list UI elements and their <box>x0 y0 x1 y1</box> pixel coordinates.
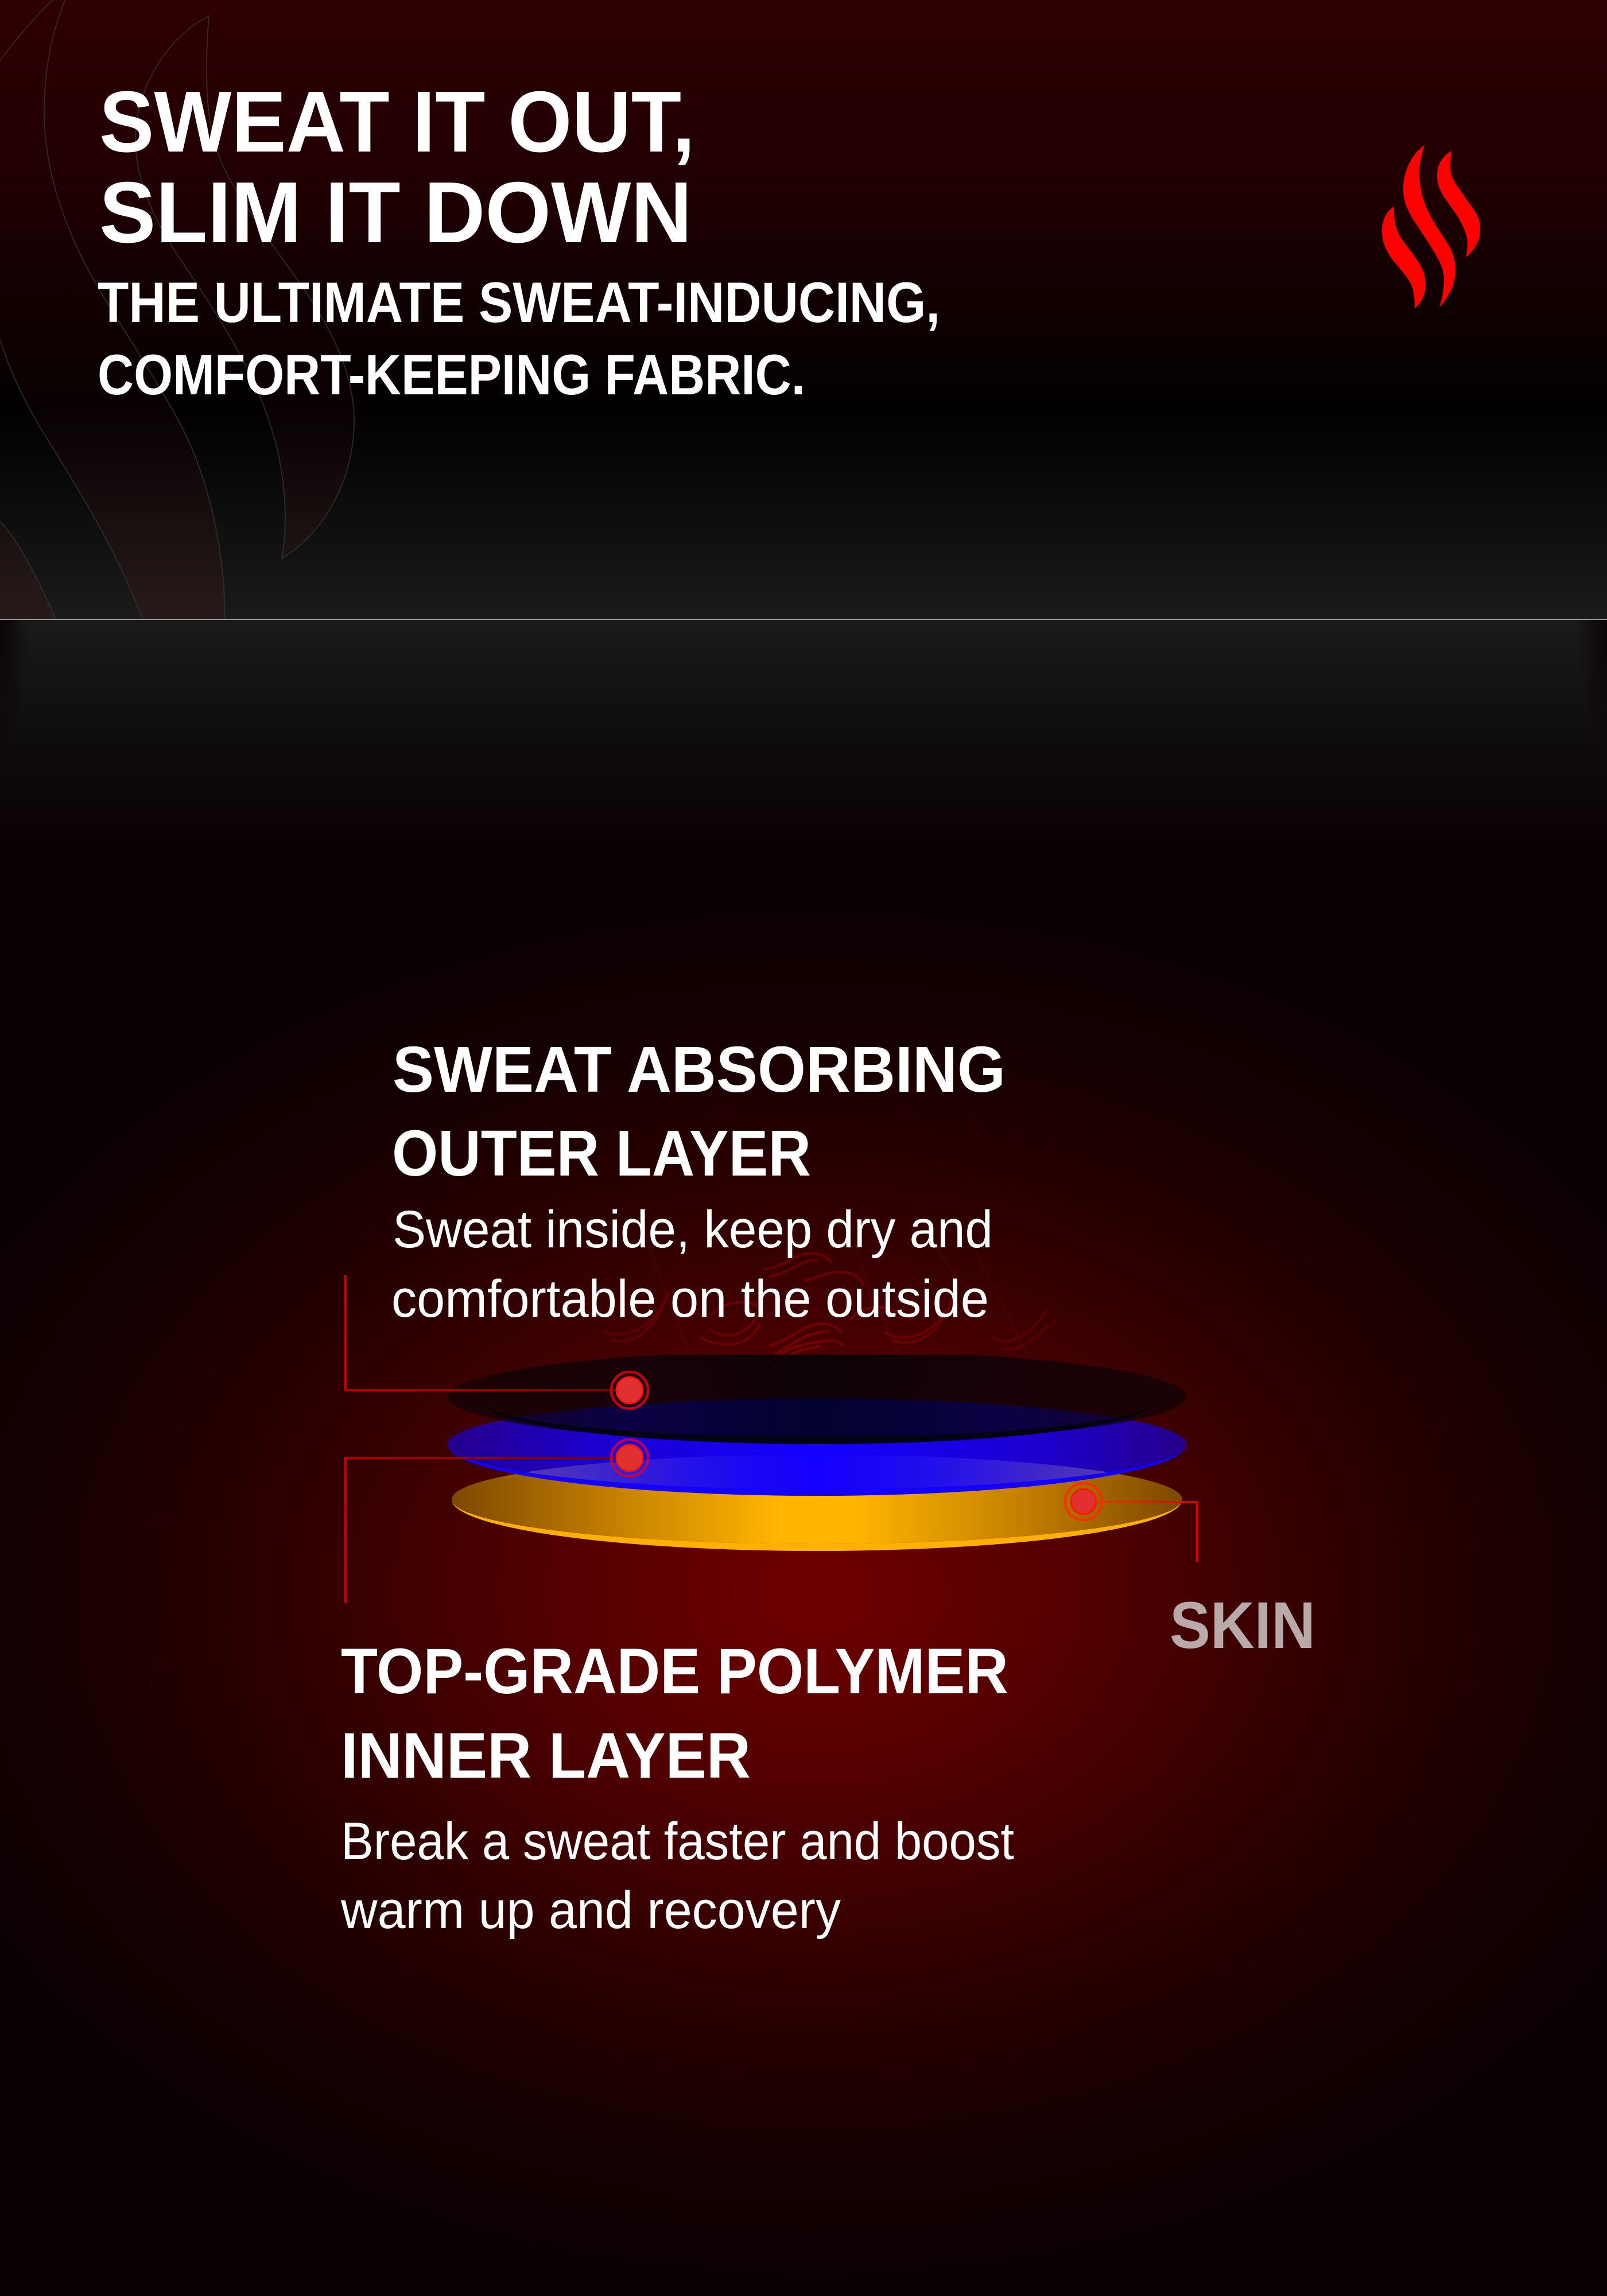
marker: outer layer <box>611 1372 648 1409</box>
subtitle: THE ULTIMATE SWEAT-INDUCING, <box>98 270 940 334</box>
blue inner layer disk <box>448 1399 1186 1496</box>
heading: top-grade polymer inner layer: TOP-GRADE POLYMER <box>341 1635 1008 1707</box>
black outer layer disk <box>448 1351 1186 1444</box>
leader line: inner layer <box>344 1458 617 1603</box>
leader line: skin <box>1096 1502 1198 1562</box>
heading: sweat absorbing outer layer: OUTER LAYER <box>392 1117 811 1189</box>
yellow skin disk <box>452 1455 1182 1551</box>
marker: skin <box>1065 1483 1102 1520</box>
heading: sweat absorbing outer layer <box>392 1033 1006 1189</box>
top header panel background <box>0 0 1607 619</box>
title: SWEAT IT OUT, <box>99 73 695 170</box>
leader line: outer layer <box>344 1275 617 1390</box>
text block: outer layer description: comfortable on the outside <box>391 1270 989 1328</box>
divider line <box>0 619 1607 620</box>
text block: outer layer description <box>391 1200 993 1328</box>
marker: inner layer <box>611 1440 648 1476</box>
text block: inner layer description <box>340 1812 1014 1940</box>
decorative flame outlines <box>0 0 354 621</box>
subtitle: COMFORT-KEEPING FABRIC. <box>98 343 805 406</box>
heading: top-grade polymer inner layer: INNER LAYER <box>341 1720 751 1791</box>
label: skin: SKIN <box>1170 1589 1315 1662</box>
icon: red flame logo <box>1382 145 1480 308</box>
title: SLIM IT DOWN <box>99 164 692 261</box>
title <box>99 73 695 261</box>
decorative filigree pattern above the disks <box>603 1240 1057 1355</box>
text block: inner layer description: warm up and recovery <box>340 1881 841 1940</box>
lower background <box>0 470 1607 2296</box>
heading: top-grade polymer inner layer <box>341 1635 1008 1791</box>
text block: inner layer description: Break a sweat faster and boost <box>341 1812 1014 1871</box>
layered fabric disks <box>448 1351 1186 1551</box>
text block: outer layer description: Sweat inside, keep dry and <box>393 1200 993 1259</box>
subtitle <box>98 270 940 406</box>
heading: sweat absorbing outer layer: SWEAT ABSORBING <box>393 1033 1006 1106</box>
